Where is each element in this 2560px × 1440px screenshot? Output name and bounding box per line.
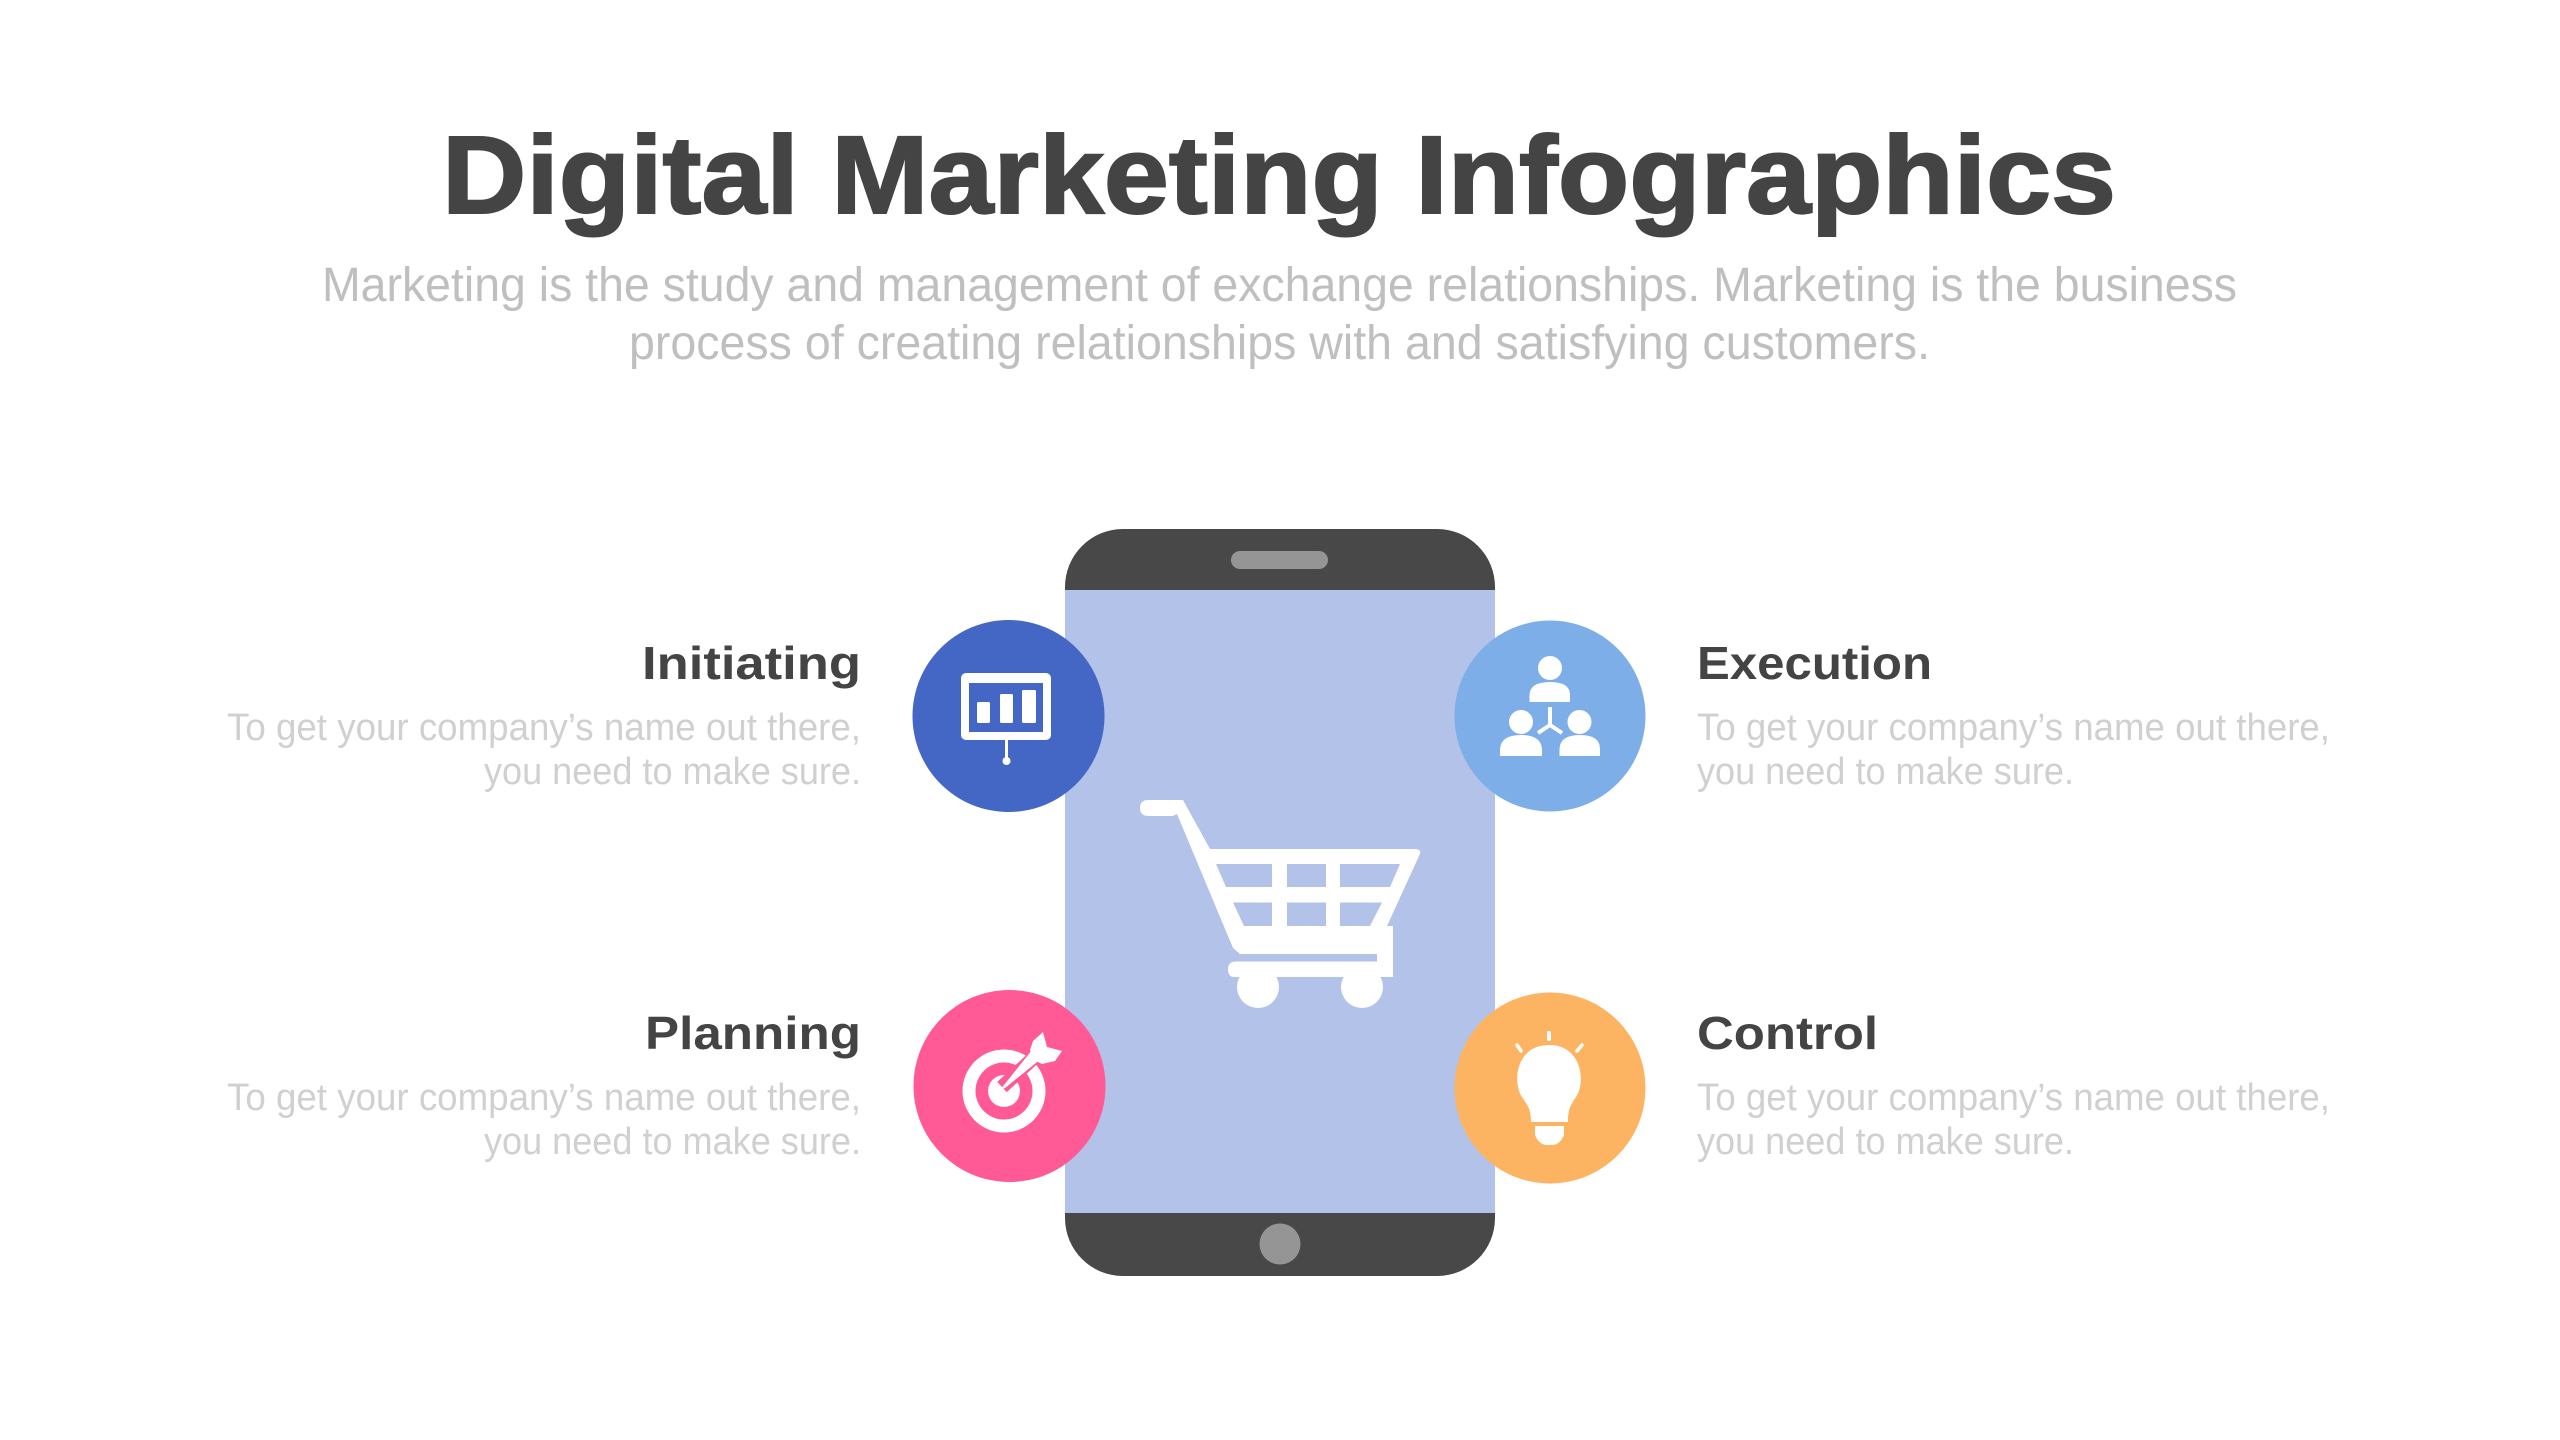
cart wheels <box>1237 966 1279 1008</box>
phone speaker <box>1231 551 1328 569</box>
icon: light bulb on orange circle <box>1454 992 1646 1184</box>
description: Planning <box>227 1077 861 1163</box>
item: Initiating <box>227 637 861 793</box>
description: Control: To get your company’s name out there, <box>1697 1077 2330 1119</box>
phone screen <box>1065 590 1495 1213</box>
subtitle text block: process of creating relationships with and satisfying customers. <box>629 317 1930 370</box>
description: Planning: you need to make sure. <box>484 1121 861 1163</box>
subtitle text block <box>322 259 2237 370</box>
description: Control <box>1697 1077 2330 1163</box>
item: Planning <box>227 1007 861 1163</box>
icon: target with arrow on pink circle <box>914 990 1106 1182</box>
description: Execution <box>1697 707 2330 793</box>
description: Execution: To get your company’s name out there, <box>1697 707 2330 749</box>
smartphone <box>1065 529 1495 1276</box>
heading: Execution: Execution <box>1697 637 1932 689</box>
subtitle text block: Marketing is the study and management of exchange relationships. Marketing is the business <box>322 259 2237 312</box>
item: Control <box>1697 1007 2330 1163</box>
description: Initiating <box>227 707 861 793</box>
icon: presentation chart on blue circle <box>912 620 1104 812</box>
phone home button <box>1260 1224 1300 1264</box>
phone body <box>1065 529 1495 1276</box>
description: Planning: To get your company’s name out there, <box>227 1077 861 1119</box>
icon: shopping cart <box>1140 800 1420 1008</box>
cart basket holes <box>1216 864 1400 926</box>
item: Execution <box>1697 637 2330 793</box>
heading: Planning: Planning <box>645 1007 861 1059</box>
description: Initiating: you need to make sure. <box>484 751 861 793</box>
title: Digital Marketing Infographics <box>442 114 2116 237</box>
description: Initiating: To get your company’s name out there, <box>227 707 861 749</box>
description: Execution: you need to make sure. <box>1697 751 2074 793</box>
icon: team hierarchy on light blue circle <box>1454 620 1646 812</box>
heading: Initiating: Initiating <box>642 637 861 689</box>
description: Control: you need to make sure. <box>1697 1121 2074 1163</box>
heading: Control: Control <box>1697 1007 1878 1059</box>
